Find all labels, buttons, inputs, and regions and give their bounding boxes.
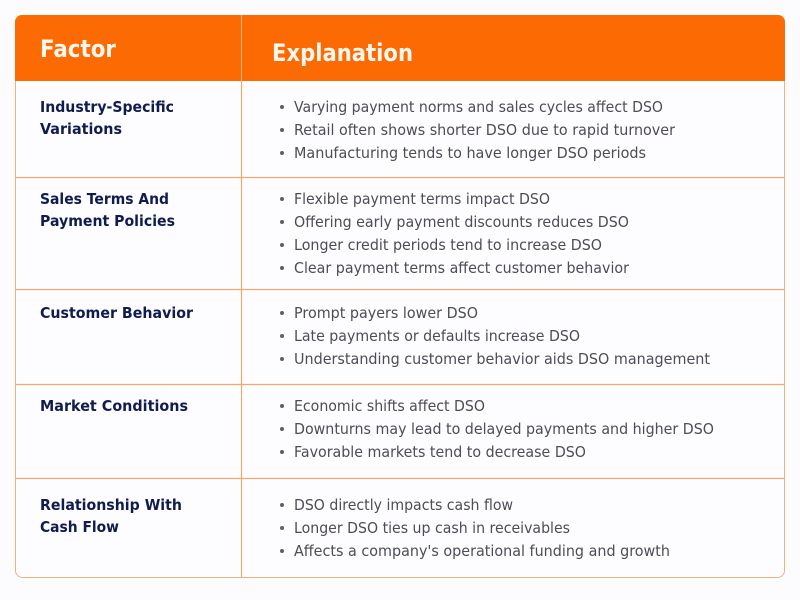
bullet list: Downturns may lead to delayed payments and higher DSO	[294, 420, 714, 438]
bullet list: Favorable markets tend to decrease DSO	[294, 443, 586, 461]
factor label: Sales Terms And	[40, 190, 169, 208]
bullet list: Affects a company's operational funding and growth	[294, 542, 670, 560]
row: customer behavior	[40, 304, 710, 368]
bullet list: Longer credit periods tend to increase DSO	[294, 236, 602, 254]
row: industry-specific variations	[40, 98, 676, 162]
factor label: Customer Behavior	[40, 304, 193, 322]
bullet list: DSO directly impacts cash flow	[294, 496, 513, 514]
header: factor: Factor	[40, 35, 116, 63]
header: explanation: Explanation	[272, 39, 413, 67]
bullet list: Flexible payment terms impact DSO	[294, 190, 550, 208]
bullet list: Longer DSO ties up cash in receivables	[294, 519, 570, 537]
bullet list	[280, 98, 676, 162]
factor label	[40, 496, 182, 536]
row: sales terms and payment policies	[40, 190, 630, 277]
bullet list: Varying payment norms and sales cycles affect DSO	[294, 98, 663, 116]
factor label: Relationship With	[40, 496, 182, 514]
bullet list: Understanding customer behavior aids DSO management	[294, 350, 710, 368]
factor label: Market Conditions	[40, 397, 188, 415]
factor label	[40, 98, 174, 138]
bullet list	[280, 190, 630, 277]
bullet list: Late payments or defaults increase DSO	[294, 327, 580, 345]
factor label: Payment Policies	[40, 212, 175, 230]
factor label	[40, 190, 175, 230]
bullet list: Economic shifts affect DSO	[294, 397, 485, 415]
bullet list	[280, 496, 670, 560]
factor label: Cash Flow	[40, 518, 119, 536]
header row	[15, 15, 785, 81]
bullet list: Clear payment terms affect customer behavior	[294, 259, 630, 277]
bullet list	[280, 397, 714, 461]
bullet list: Manufacturing tends to have longer DSO periods	[294, 144, 646, 162]
row: relationship with cash flow	[40, 496, 670, 560]
bullet list: Offering early payment discounts reduces DSO	[294, 213, 629, 231]
factor label: Industry-Specific	[40, 98, 174, 116]
row: market conditions	[40, 397, 714, 461]
bullet list	[280, 304, 710, 368]
bullet list: Prompt payers lower DSO	[294, 304, 478, 322]
factor label: Variations	[40, 120, 122, 138]
bullet list: Retail often shows shorter DSO due to rapid turnover	[294, 121, 676, 139]
